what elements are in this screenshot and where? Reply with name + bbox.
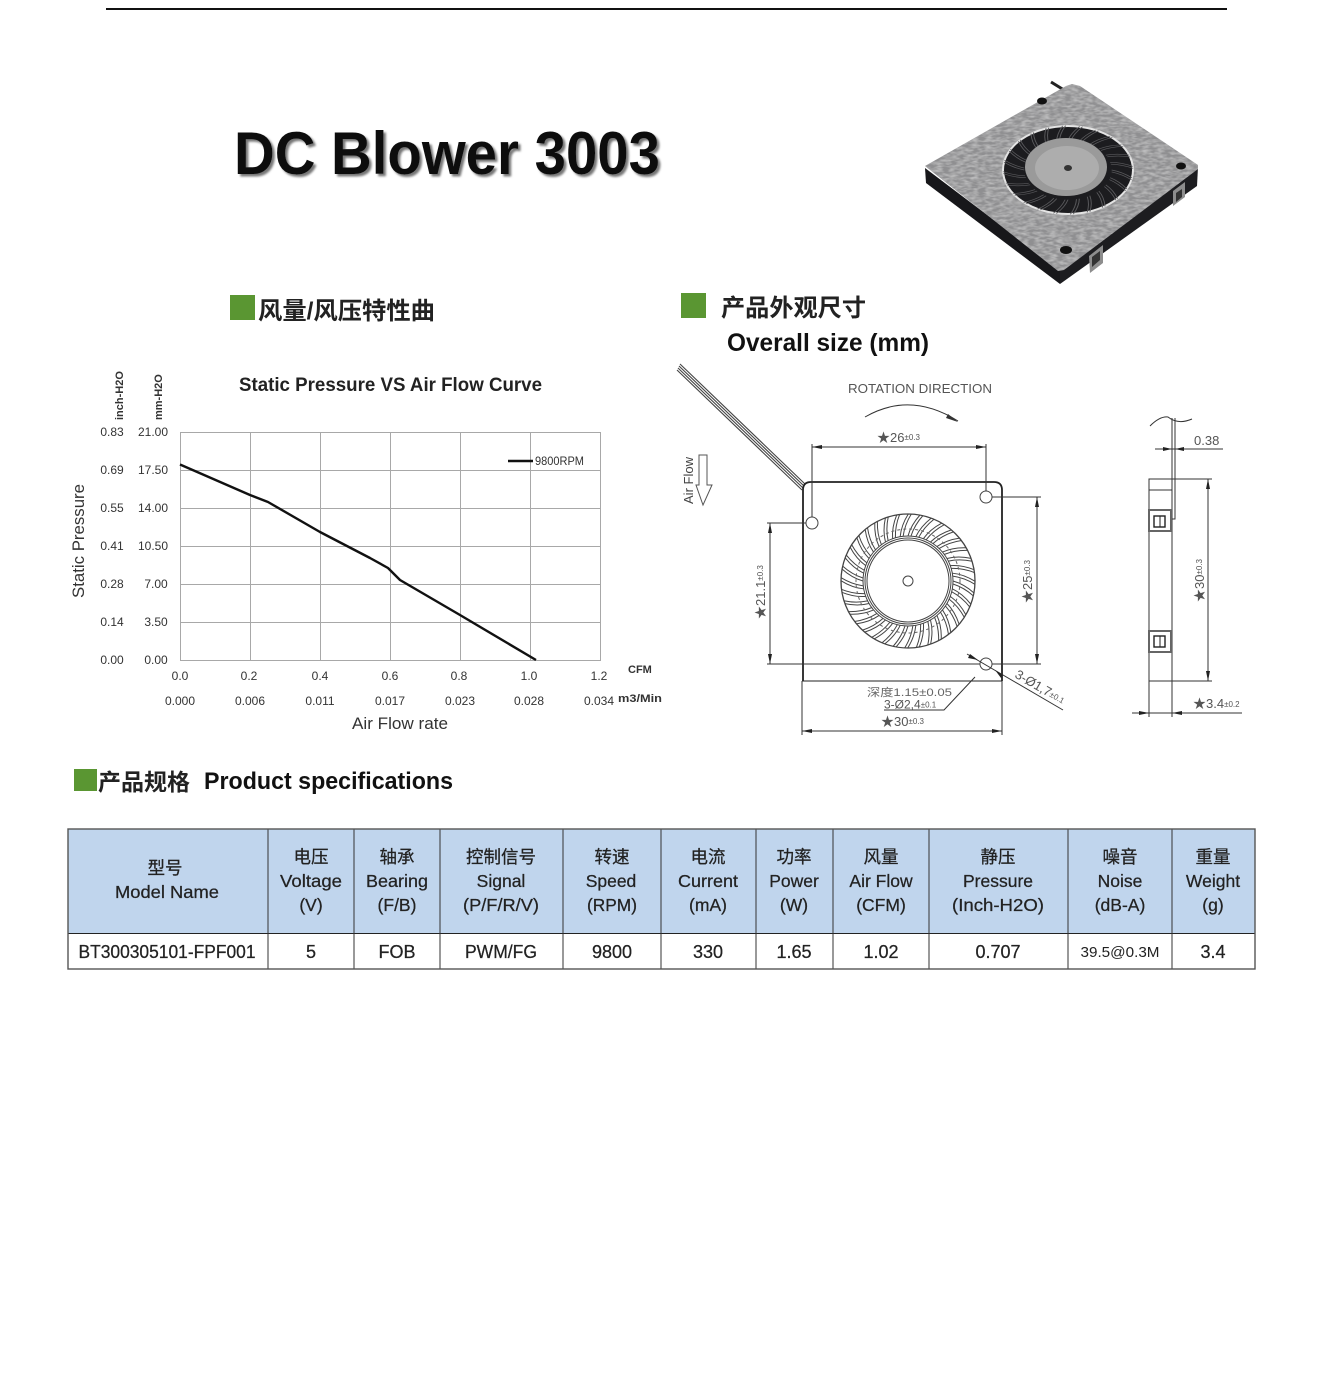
x axis labels m3/Min: 0.034 bbox=[584, 694, 614, 708]
y axis labels inch-H2O: 0.41 bbox=[100, 539, 124, 553]
column: speed: 9800 bbox=[592, 942, 632, 962]
cable bbox=[677, 364, 805, 490]
column: noise bbox=[1080, 847, 1160, 961]
y axis labels mm-H2O: 0.00 bbox=[144, 653, 168, 667]
column: noise: Noise bbox=[1098, 871, 1142, 891]
x axis labels m3/Min: 0.011 bbox=[305, 694, 335, 708]
dimension: 3.4: ★3.4 bbox=[1193, 696, 1224, 711]
column: noise: (dB-A) bbox=[1095, 895, 1145, 915]
column: signal: 控制信号 bbox=[466, 847, 536, 867]
x axis labels m3/Min: 0.017 bbox=[375, 694, 405, 708]
dimension: 30 width: ★30 bbox=[881, 714, 908, 729]
dimension: 25 bbox=[992, 497, 1041, 664]
column: weight: 重量 bbox=[1196, 847, 1230, 867]
column: power: Power bbox=[769, 871, 819, 891]
y axis labels inch-H2O: 0.69 bbox=[100, 463, 124, 477]
column: model name bbox=[78, 858, 256, 962]
column: model name: BT300305101-FPF001 bbox=[78, 942, 256, 962]
x axis labels CFM: 1.2 bbox=[591, 669, 608, 683]
x axis labels m3/Min bbox=[165, 693, 662, 708]
callout: 1.7 hole: ±0.1 bbox=[1048, 690, 1066, 706]
legend: 9800RPM bbox=[535, 454, 584, 468]
column: weight bbox=[1186, 847, 1240, 962]
column: voltage: (V) bbox=[299, 895, 323, 915]
column: speed: (RPM) bbox=[587, 895, 637, 915]
dimension: 3.4 bbox=[1132, 681, 1242, 717]
x axis labels m3/Min: 0.028 bbox=[514, 694, 544, 708]
column: bearing: Bearing bbox=[366, 871, 428, 891]
dimension: 21.1: ★21.1 bbox=[753, 581, 768, 619]
column: bearing: (F/B) bbox=[378, 895, 416, 915]
column: noise: 39.5@0.3M bbox=[1080, 944, 1160, 961]
specifications table bbox=[68, 829, 1255, 969]
column: pressure bbox=[952, 847, 1044, 962]
column: voltage bbox=[280, 847, 342, 962]
upper connector tab bbox=[1149, 510, 1171, 531]
x axis labels m3/Min: 0.023 bbox=[445, 694, 475, 708]
column: signal: PWM/FG bbox=[465, 942, 537, 962]
column: current: 电流 bbox=[690, 847, 726, 867]
column: noise: 噪音 bbox=[1102, 847, 1138, 867]
x axis labels CFM: 0.0 bbox=[172, 669, 189, 683]
heading: product specifications bbox=[74, 768, 453, 795]
column: air flow: 1.02 bbox=[863, 942, 899, 962]
x axis labels m3/Min: 0.000 bbox=[165, 694, 195, 708]
heading: product specifications: 产品规格 bbox=[98, 769, 190, 795]
y axis labels inch-H2O: 0.14 bbox=[100, 615, 124, 629]
y axis labels inch-H2O: 0.55 bbox=[100, 501, 124, 515]
housing outline bbox=[802, 482, 1002, 681]
column: weight: (g) bbox=[1202, 895, 1224, 915]
column: pressure: 0.707 bbox=[975, 942, 1021, 962]
dimension: 30 height: ±0.3 bbox=[1195, 558, 1204, 575]
legend bbox=[508, 454, 584, 468]
product photo: blower fan bbox=[925, 82, 1198, 284]
plot grid bbox=[180, 432, 600, 660]
column: power bbox=[769, 847, 819, 962]
column: power: (W) bbox=[780, 895, 808, 915]
title: DC Blower 3003 bbox=[234, 120, 660, 187]
callout: 1.7 hole: 3-Ø1,7 bbox=[1012, 667, 1054, 699]
mounting holes bbox=[806, 491, 992, 670]
lower connector tab bbox=[1149, 631, 1171, 652]
dimension: 3.4: ±0.2 bbox=[1224, 700, 1240, 709]
heading: product specifications: Product specifications bbox=[204, 768, 453, 795]
column: pressure: Pressure bbox=[963, 871, 1033, 891]
rotation direction: ROTATION DIRECTION bbox=[848, 381, 992, 396]
dimension: 21.1 bbox=[753, 523, 980, 664]
dimension: 25: ±0.3 bbox=[1023, 559, 1032, 576]
x axis labels m3/Min: m3/Min bbox=[618, 693, 662, 705]
column: air flow: Air Flow bbox=[849, 871, 913, 891]
dimension: 30 height: ★30 bbox=[1192, 575, 1207, 602]
dimension: 26: ±0.3 bbox=[904, 433, 921, 442]
y axis title: Static Pressure bbox=[69, 484, 88, 598]
dimension: 30 width bbox=[802, 681, 1002, 735]
x axis labels m3/Min: 0.006 bbox=[235, 694, 265, 708]
callout: depth and 2.4 hole: 3-Ø2,4 bbox=[884, 698, 921, 712]
impeller bbox=[840, 513, 976, 649]
column: signal bbox=[463, 847, 539, 962]
dimension: 25: ★25 bbox=[1020, 576, 1035, 603]
column: power: 功率 bbox=[776, 847, 812, 867]
x axis labels CFM: 0.8 bbox=[451, 669, 468, 683]
dimension drawing: side view bbox=[1132, 417, 1242, 717]
x axis labels CFM bbox=[172, 664, 652, 683]
x axis labels CFM: 0.2 bbox=[241, 669, 258, 683]
column: current: Current bbox=[678, 871, 738, 891]
chart title: Static Pressure VS Air Flow Curve bbox=[239, 375, 542, 396]
heading: airflow / pressure curve: 风量/风压特性曲 bbox=[258, 298, 435, 325]
table header background bbox=[68, 829, 1255, 933]
air flow arrow bbox=[681, 455, 712, 505]
y axis labels mm-H2O: 3.50 bbox=[144, 615, 168, 629]
column: speed bbox=[586, 847, 637, 962]
y axis labels mm-H2O: 7.00 bbox=[144, 577, 168, 591]
column: model name: Model Name bbox=[115, 882, 219, 902]
chart: static pressure vs air flow curve bbox=[69, 371, 662, 733]
dimension: 0.38: 0.38 bbox=[1194, 433, 1219, 448]
column: current bbox=[678, 847, 738, 962]
y axis labels inch-H2O: 0.83 bbox=[100, 425, 124, 439]
dimension: 26: ★26 bbox=[877, 430, 904, 445]
column: voltage: Voltage bbox=[280, 871, 342, 891]
column: bearing bbox=[366, 847, 428, 962]
y axis labels inch-H2O: inch-H2O bbox=[114, 371, 126, 420]
side body bbox=[1149, 417, 1192, 681]
callout: depth and 2.4 hole: ±0.1 bbox=[921, 700, 937, 710]
column: signal: (P/F/R/V) bbox=[463, 895, 539, 915]
x axis labels CFM: 0.4 bbox=[312, 669, 329, 683]
heading: overall size bbox=[681, 293, 929, 357]
y axis labels inch-H2O: 0.28 bbox=[100, 577, 124, 591]
column: bearing: 轴承 bbox=[380, 847, 414, 867]
x axis labels CFM: CFM bbox=[628, 664, 652, 676]
heading: overall size: 产品外观尺寸 bbox=[721, 295, 866, 322]
y axis labels mm-H2O: 21.00 bbox=[138, 425, 168, 439]
y axis labels mm-H2O: 17.50 bbox=[138, 463, 168, 477]
x axis title: Air Flow rate bbox=[352, 714, 448, 733]
dimension: 30 width: ±0.3 bbox=[908, 717, 925, 726]
callout: 1.7 hole bbox=[967, 654, 1068, 710]
table borders bbox=[68, 829, 1255, 969]
callout: depth and 2.4 hole bbox=[867, 677, 975, 712]
column: current: (mA) bbox=[689, 895, 727, 915]
column: air flow bbox=[849, 847, 913, 962]
column: current: 330 bbox=[693, 942, 723, 962]
column: voltage: 5 bbox=[306, 942, 316, 962]
dimension drawing: front view bbox=[677, 364, 1068, 735]
column: speed: 转速 bbox=[594, 847, 630, 867]
column: signal: Signal bbox=[477, 871, 525, 891]
column: pressure: (Inch-H2O) bbox=[952, 895, 1044, 915]
callout: depth and 2.4 hole: 深度1.15±0.05 bbox=[867, 685, 952, 699]
performance curve 9800RPM bbox=[180, 464, 536, 660]
x axis labels CFM: 1.0 bbox=[521, 669, 538, 683]
rotation direction bbox=[848, 381, 992, 422]
y axis labels inch-H2O: 0.00 bbox=[100, 653, 124, 667]
y axis labels mm-H2O: 14.00 bbox=[138, 501, 168, 515]
dimension: 21.1: ±0.3 bbox=[756, 565, 765, 581]
x axis labels CFM: 0.6 bbox=[382, 669, 399, 683]
column: speed: Speed bbox=[586, 871, 636, 891]
column: weight: Weight bbox=[1186, 871, 1240, 891]
air flow arrow: Air Flow bbox=[681, 456, 696, 504]
dimension: 30 height bbox=[1172, 479, 1212, 681]
y axis labels mm-H2O: mm-H2O bbox=[153, 374, 165, 420]
column: bearing: FOB bbox=[378, 942, 416, 962]
column: voltage: 电压 bbox=[294, 847, 328, 867]
dimension: 26 bbox=[812, 430, 986, 517]
y axis labels inch-H2O bbox=[100, 371, 126, 667]
column: air flow: (CFM) bbox=[856, 895, 906, 915]
column: pressure: 静压 bbox=[980, 847, 1016, 867]
y axis labels mm-H2O bbox=[138, 374, 168, 667]
column: weight: 3.4 bbox=[1200, 942, 1226, 962]
heading: overall size: Overall size (mm) bbox=[727, 329, 929, 357]
column: model name: 型号 bbox=[148, 858, 182, 878]
column: power: 1.65 bbox=[776, 942, 812, 962]
column: air flow: 风量 bbox=[864, 847, 898, 867]
dimension: 0.38 bbox=[1155, 433, 1223, 451]
y axis labels mm-H2O: 10.50 bbox=[138, 539, 168, 553]
